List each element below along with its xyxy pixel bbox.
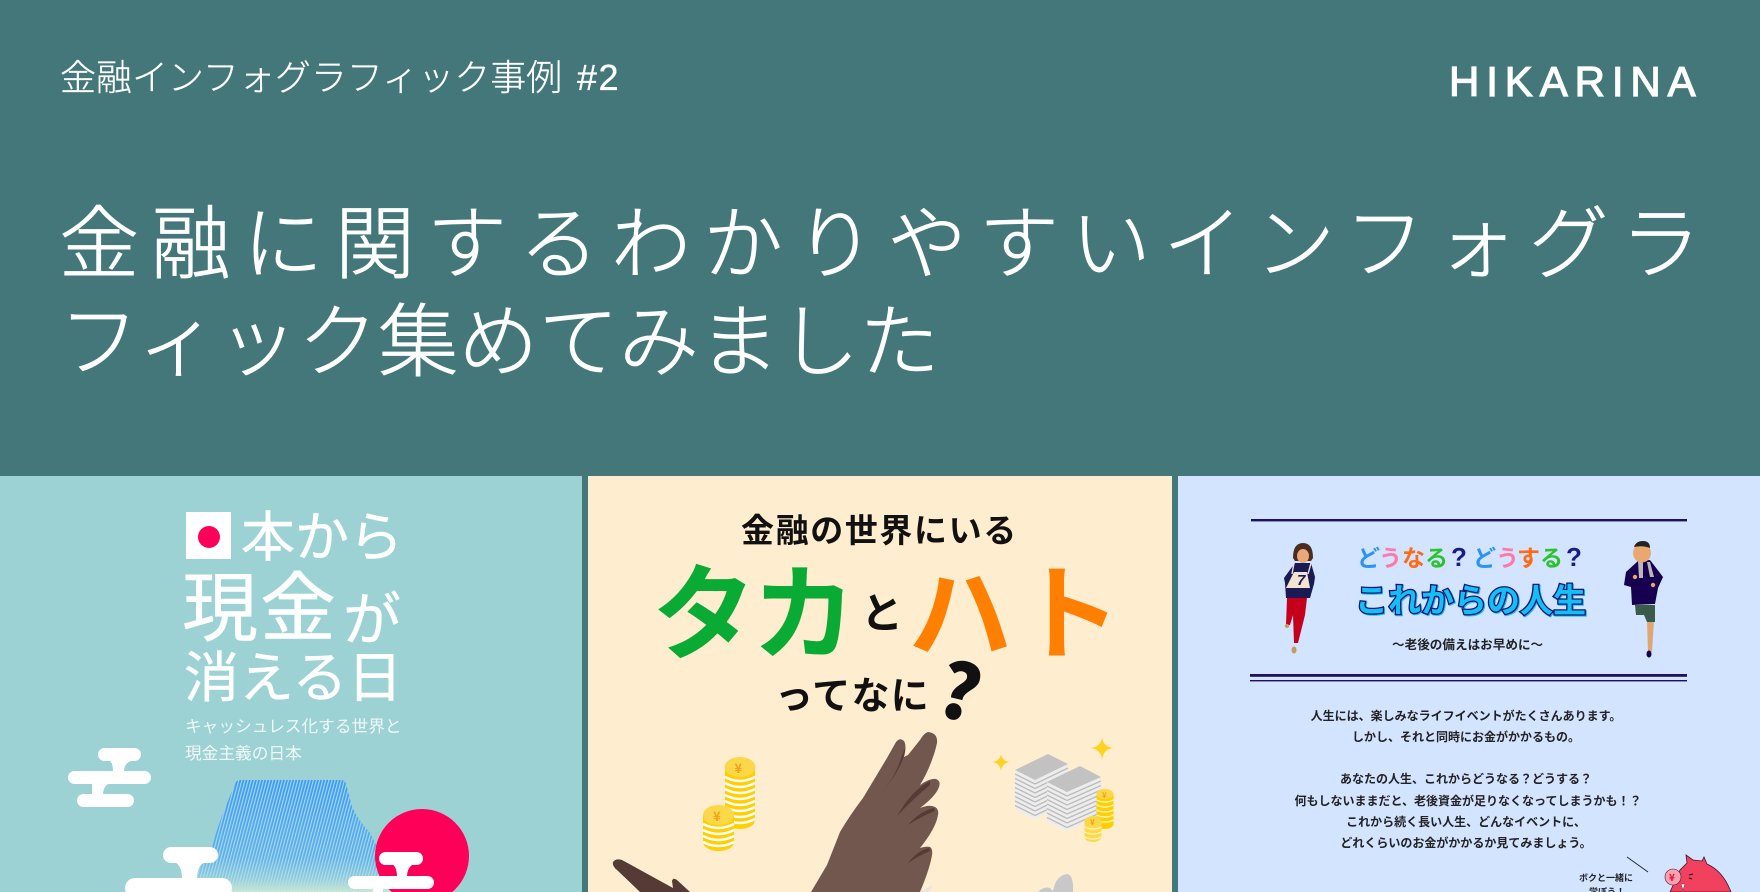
- illustration: woman running: 7: [1297, 572, 1306, 589]
- poster heading colourful: ?: [1566, 542, 1582, 572]
- speech text: [1579, 873, 1632, 892]
- icon: small coin stack right: ¥: [1102, 790, 1107, 801]
- body text: しかし、それと同時にお金がかかるもの。: [1352, 728, 1580, 745]
- speech text: ボクと一緒に: [1579, 871, 1633, 884]
- poster title: 本から: [241, 493, 403, 572]
- poster heading colourful: る: [1425, 539, 1448, 573]
- poster heading colourful: す: [1517, 539, 1540, 573]
- poster title outlined: これからの人生: [1355, 574, 1586, 622]
- illustration: boar mascot: [1665, 855, 1731, 892]
- speech line: [1627, 857, 1648, 872]
- icon: coin stack tall: [725, 757, 755, 829]
- rules bottom: [1250, 674, 1687, 681]
- poster heading colourful: ?: [1451, 542, 1467, 572]
- poster title: hato: ハト: [908, 530, 1123, 681]
- icon: banknote stack front: [1047, 766, 1101, 831]
- illustration: mount Fuji: [197, 780, 392, 892]
- illustration: dove wing: [920, 874, 1073, 892]
- question mark: ?: [928, 629, 994, 745]
- panel: cashless Japan: [0, 476, 582, 892]
- illustration: cloud centre: [125, 847, 232, 892]
- poster heading colourful: う: [1379, 539, 1402, 573]
- body text: あなたの人生、これからどうなる？どうする？: [1340, 770, 1592, 787]
- poster heading colourful: ど: [1357, 539, 1380, 573]
- poster subtitle: 現金主義の日本: [185, 740, 302, 764]
- poster subtitle: [186, 718, 399, 761]
- poster heading colourful: る: [1540, 539, 1563, 573]
- poster heading colourful: ど: [1473, 539, 1496, 573]
- icon: coin stack short: ¥: [713, 806, 721, 825]
- poster heading line: 金融の世界にいる: [741, 504, 1018, 552]
- body text: 何もしないままだと、老後資金が足りなくなってしまうかも！？: [1295, 792, 1641, 809]
- poster subtitle: 〜老後の備えはお早めに〜: [1392, 634, 1544, 653]
- poster heading colourful: な: [1402, 539, 1425, 573]
- poster title: 現金: [182, 547, 338, 657]
- illustration: cloud right: [348, 852, 434, 892]
- illustration: red sun: [375, 809, 469, 892]
- rule top: [1251, 519, 1687, 521]
- illustration: woman running: [1284, 543, 1315, 654]
- body text: どれくらいのお金がかかるか見てみましょう。: [1340, 834, 1592, 851]
- eyebrow heading: #2: [577, 57, 620, 98]
- panel: hawks and doves: [588, 476, 1172, 892]
- icon: sparkle small: [992, 754, 1010, 771]
- illustration: hawk wing: [613, 732, 940, 892]
- eyebrow heading: 金融インフォグラフィック事例: [60, 49, 562, 101]
- main title: 金融に関するわかりやすいインフォグラ: [59, 180, 1713, 296]
- icon: Japanese flag: [186, 512, 231, 559]
- poster heading colourful: う: [1496, 539, 1519, 573]
- main title: フィック集めてみました: [59, 278, 940, 394]
- logo: HIKARINA: HIKARINA: [1449, 58, 1703, 105]
- poster heading tail: ってなに: [775, 665, 930, 720]
- poster title: [184, 510, 400, 702]
- body text: これから続く長い人生、どんなイベントに、: [1346, 813, 1586, 830]
- body text: [1295, 707, 1641, 851]
- illustration: boar mascot: ¥: [1669, 869, 1675, 884]
- icon: banknote stack back: [1015, 754, 1068, 819]
- icon: small coin stack front: ¥: [1090, 817, 1095, 828]
- icon: coin stack short: [703, 805, 734, 851]
- poster title: が: [343, 573, 401, 657]
- poster title: taka: タカ: [652, 530, 852, 681]
- icon: coin stack tall: ¥: [734, 758, 742, 777]
- main title: [59, 180, 1713, 394]
- poster subtitle: キャッシュレス化する世界と: [185, 713, 402, 737]
- icon: small coin stack front: [1084, 816, 1102, 842]
- illustration: man running: [1624, 541, 1663, 658]
- icon: sparkle large: [1090, 737, 1114, 760]
- icon: small coin stack right: [1096, 789, 1114, 829]
- body text: 人生には、楽しみなライフイベントがたくさんあります。: [1311, 707, 1621, 724]
- illustration: cloud left: [68, 748, 151, 807]
- poster title: 消える日: [184, 633, 402, 713]
- poster title: to: と: [861, 580, 903, 641]
- panel: life plan: [1178, 476, 1760, 892]
